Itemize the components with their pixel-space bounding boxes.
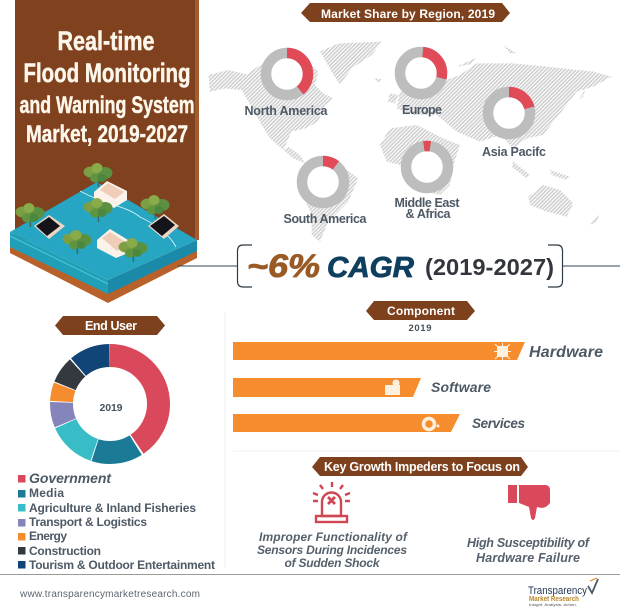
text: sensor impeder: Sensors During Incidences — [257, 543, 407, 557]
bar: Software: Software — [431, 379, 491, 395]
title panel — [15, 0, 199, 240]
logo: Transparency Market Research: Transparency — [528, 585, 587, 597]
label: Asia Pacific: Asia Pacifc — [482, 145, 546, 159]
heading: component ribbon: Component — [387, 304, 455, 318]
bar: Hardware: Hardware — [529, 344, 603, 361]
heading: component ribbon — [366, 301, 475, 320]
CAGR callout: CAGR — [327, 252, 414, 284]
CAGR callout: ~6% — [247, 248, 320, 284]
world map — [208, 42, 612, 242]
heading: end user ribbon: End User — [85, 319, 137, 333]
end user legend: Government — [29, 470, 112, 486]
end user legend: Agriculture & Inland Fisheries — [29, 501, 196, 515]
title: Real-time — [58, 26, 154, 56]
donut: Middle East and Africa — [406, 146, 448, 188]
component year: 2019 — [408, 323, 432, 334]
donut: Asia Pacific — [488, 92, 530, 134]
text: hardware impeder: Hardware Failure — [476, 551, 580, 565]
label: Middle East and Africa: Middle East — [394, 196, 460, 210]
text: hardware impeder — [467, 536, 591, 565]
end user legend: Tourism & Outdoor Entertainment — [29, 558, 215, 572]
heading: market share ribbon: Market Share by Region, 2019 — [321, 7, 495, 21]
text: sensor impeder — [257, 530, 408, 570]
donut: Europe — [400, 52, 442, 94]
label: South America: South America — [284, 212, 368, 226]
CAGR callout — [178, 245, 620, 287]
solar panel: right — [148, 214, 179, 239]
title: Market, 2019-2027 — [26, 121, 188, 148]
end user legend: Transport & Logistics — [29, 515, 147, 529]
palm trees — [16, 163, 170, 262]
bar: Services — [233, 414, 525, 432]
solar panel: left — [34, 215, 65, 239]
website url: www.transparencymarketresearch.com — [19, 589, 200, 600]
end user legend: Media — [29, 486, 64, 500]
label: Middle East and Africa — [394, 196, 460, 221]
heading: end user ribbon — [55, 316, 165, 335]
label: Middle East and Africa: & Africa — [406, 207, 452, 221]
donut: North America — [266, 53, 308, 95]
icon: alarm siren — [313, 482, 350, 522]
CAGR callout: (2019-2027) — [425, 254, 554, 280]
icon: software — [385, 380, 400, 395]
bar: Services: Services — [472, 416, 525, 431]
title — [20, 26, 194, 148]
text: hardware impeder: High Susceptibility of — [467, 536, 591, 550]
title: and Warning System — [20, 92, 194, 119]
house: rear — [94, 181, 127, 208]
label: North America: North America — [244, 104, 329, 118]
end user legend — [18, 470, 215, 572]
footer rule — [0, 574, 620, 576]
house: front — [97, 229, 133, 258]
text: sensor impeder: of Sudden Shock — [284, 556, 381, 570]
title: Flood Monitoring — [24, 58, 190, 88]
illustration: flooded isometric land — [10, 163, 197, 303]
label: Europe: Europe — [402, 103, 442, 117]
bar: Software — [233, 378, 491, 397]
logo: Transparency Market Research: Insight. Analysis. Action. — [529, 602, 577, 607]
icon: thumbs down — [508, 485, 550, 520]
logo: Transparency Market Research — [528, 578, 598, 607]
icon: gear — [424, 418, 440, 430]
end user legend: Energy — [29, 529, 67, 543]
text: sensor impeder: Improper Functionality of — [259, 530, 408, 544]
end user donut chart — [62, 356, 158, 452]
donut: South America — [302, 161, 344, 203]
heading: market share ribbon — [301, 3, 510, 22]
donut centre label: 2019 — [100, 402, 123, 414]
end user legend: Construction — [29, 544, 101, 558]
icon: chip — [494, 343, 511, 360]
logo: Transparency Market Research: Market Research — [529, 596, 579, 603]
bar: Hardware — [233, 342, 603, 361]
heading: key growth impeders ribbon — [312, 457, 528, 476]
heading: key growth impeders ribbon: Key Growth Impeders to Focus on — [324, 460, 520, 474]
